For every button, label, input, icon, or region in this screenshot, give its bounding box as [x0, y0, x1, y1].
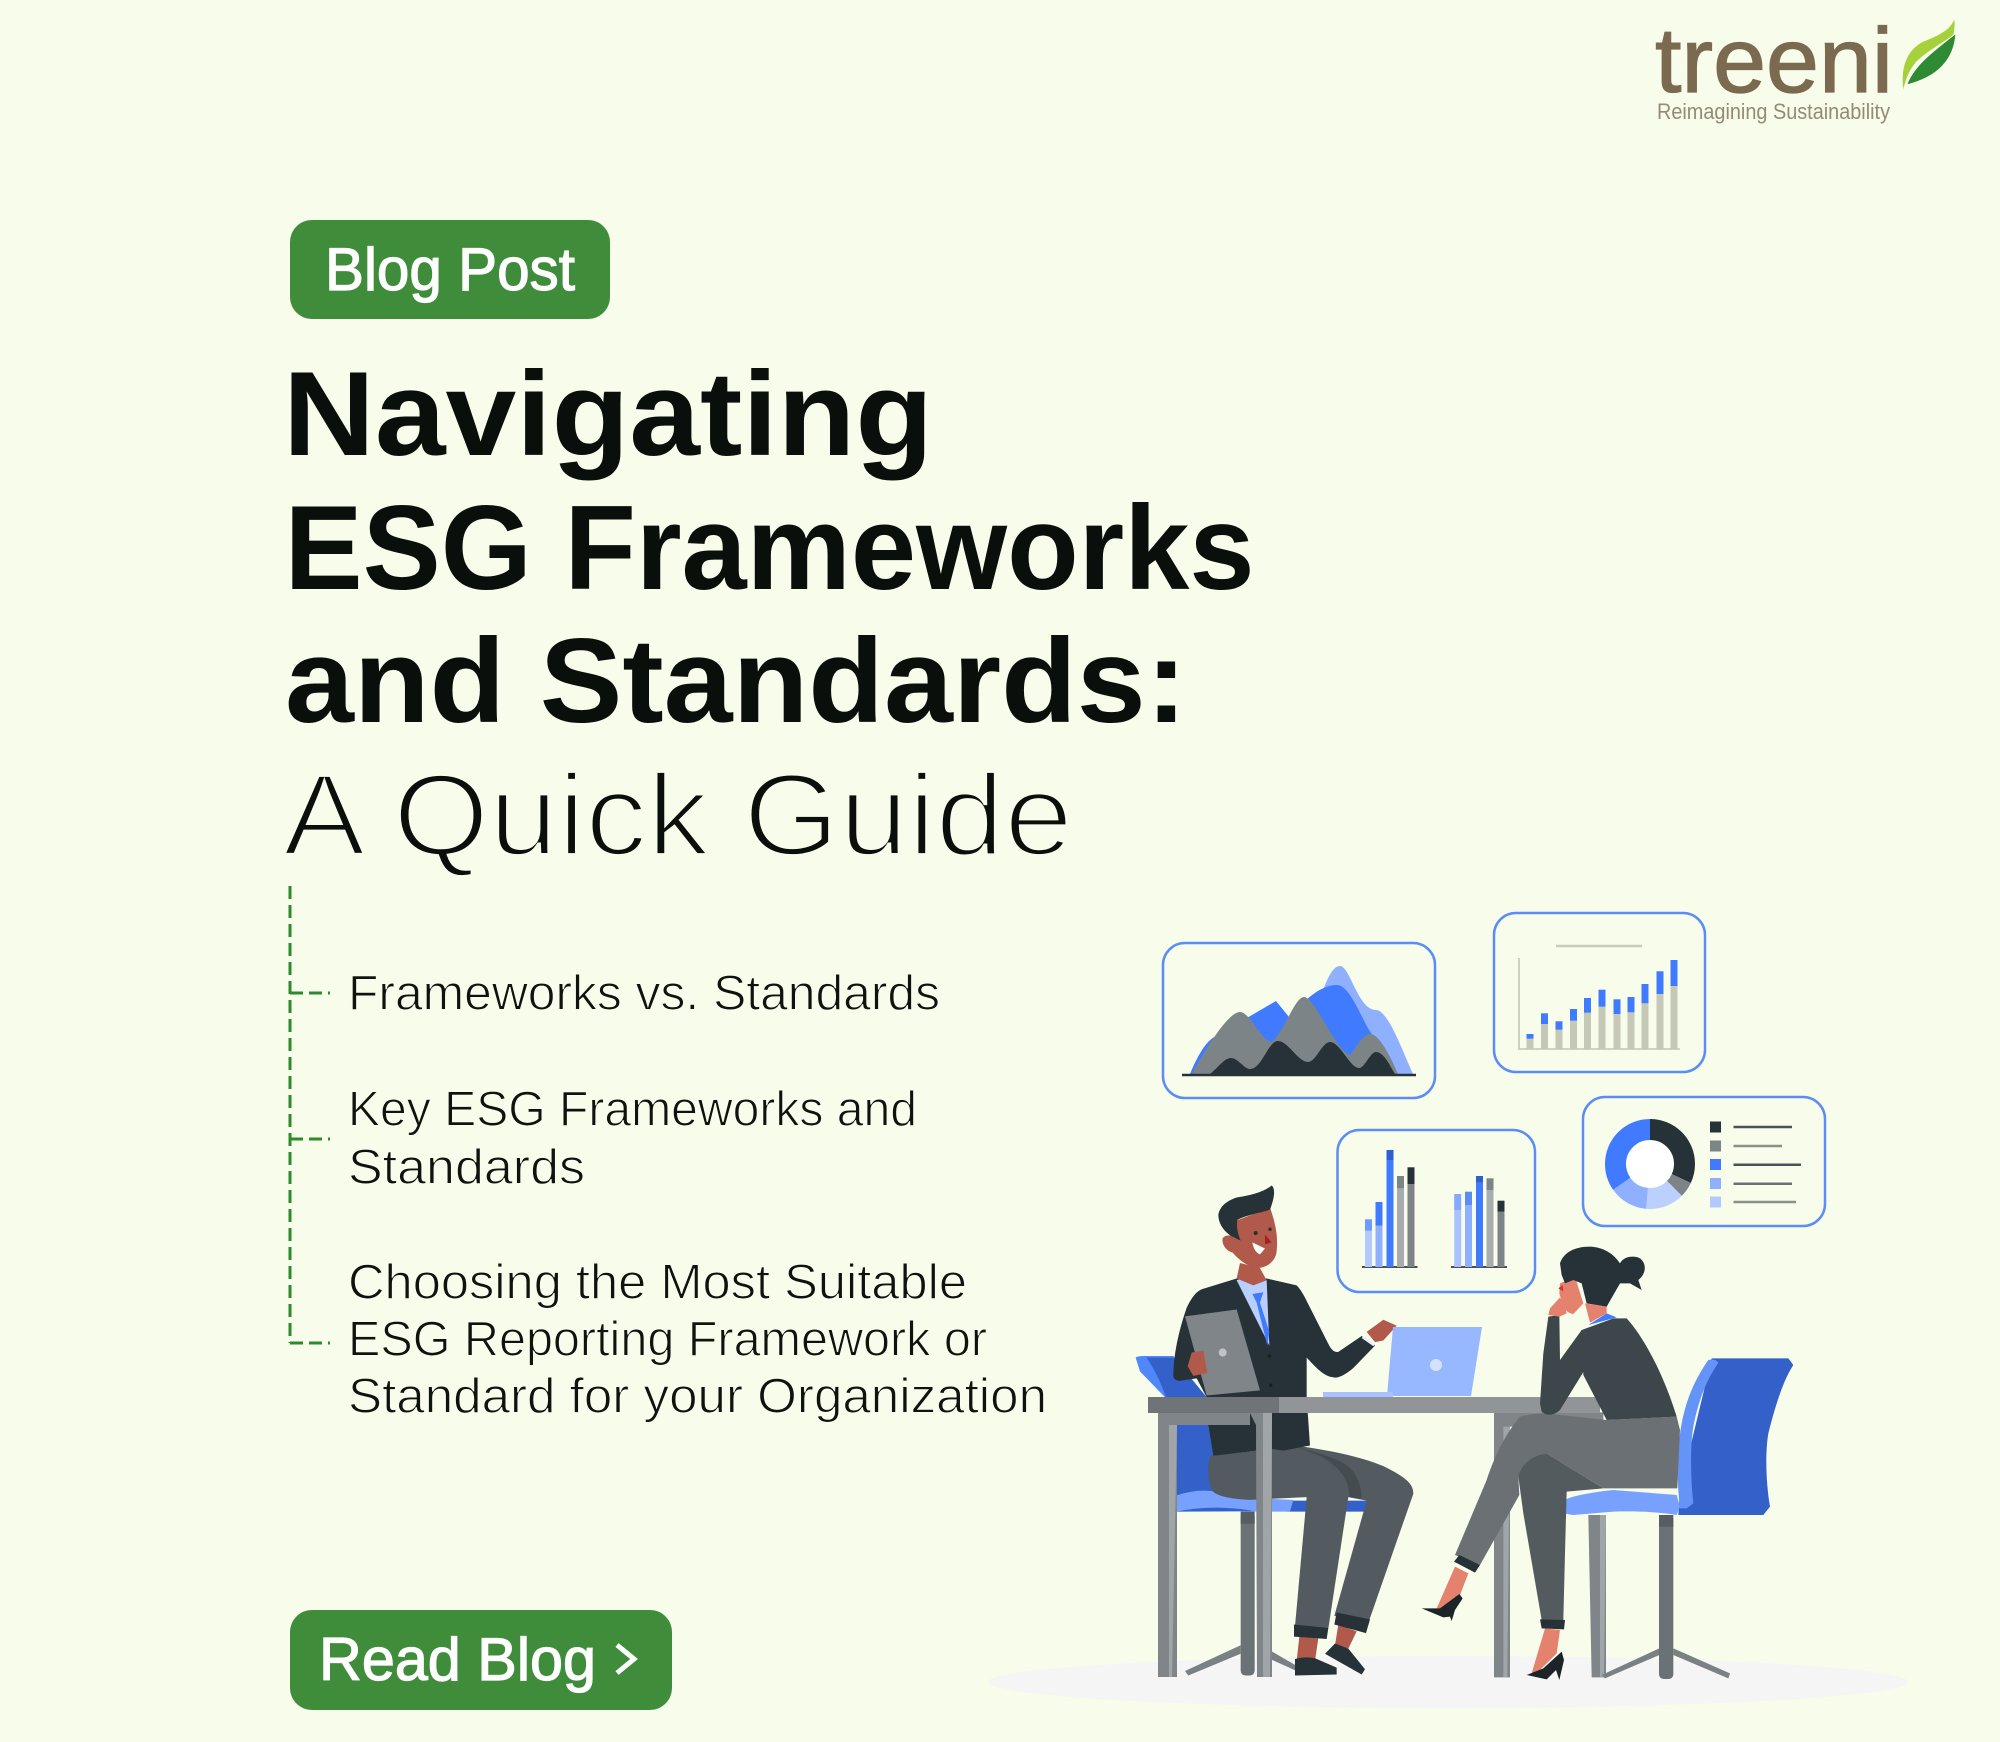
panel: stacked bar trend chart [1494, 913, 1705, 1072]
woman's chair and rear table legs [1494, 1358, 1793, 1679]
button: Read Blog: Read Blog [319, 1626, 596, 1693]
floor shadow [988, 1656, 1908, 1708]
list of topics: ESG Reporting Framework or [348, 1312, 987, 1366]
desk [1148, 1327, 1600, 1677]
title: and Standards: [285, 614, 1187, 748]
list of topics: Frameworks vs. Standards [348, 966, 940, 1020]
logo: treeni: treeni [1655, 10, 1893, 112]
panel: area chart [1163, 943, 1435, 1098]
logo: treeni [1655, 10, 1956, 124]
list of topics: Standard for your Organization [348, 1370, 1047, 1424]
logo: treeni: Reimagining Sustainability [1657, 99, 1890, 124]
woman [1422, 1247, 1680, 1680]
title: Navigating [283, 347, 933, 481]
list of topics: Key ESG Frameworks and [348, 1082, 917, 1136]
list of topics [348, 966, 1047, 1424]
button: Read Blog [290, 1610, 672, 1710]
badge: Blog Post [290, 220, 610, 319]
panel: grouped bar chart [1338, 1130, 1535, 1292]
list of topics: Choosing the Most Suitable [348, 1256, 967, 1310]
title: ESG Frameworks [284, 481, 1254, 615]
title: A Quick Guide [283, 750, 1073, 880]
title [283, 347, 1254, 880]
man [1173, 1185, 1413, 1676]
man's chair [1136, 1356, 1372, 1676]
panel: donut chart with legend [1583, 1097, 1825, 1226]
list of topics: Standards [348, 1140, 585, 1194]
badge: Blog Post: Blog Post [325, 236, 575, 303]
dashed connector tree [290, 886, 330, 1343]
